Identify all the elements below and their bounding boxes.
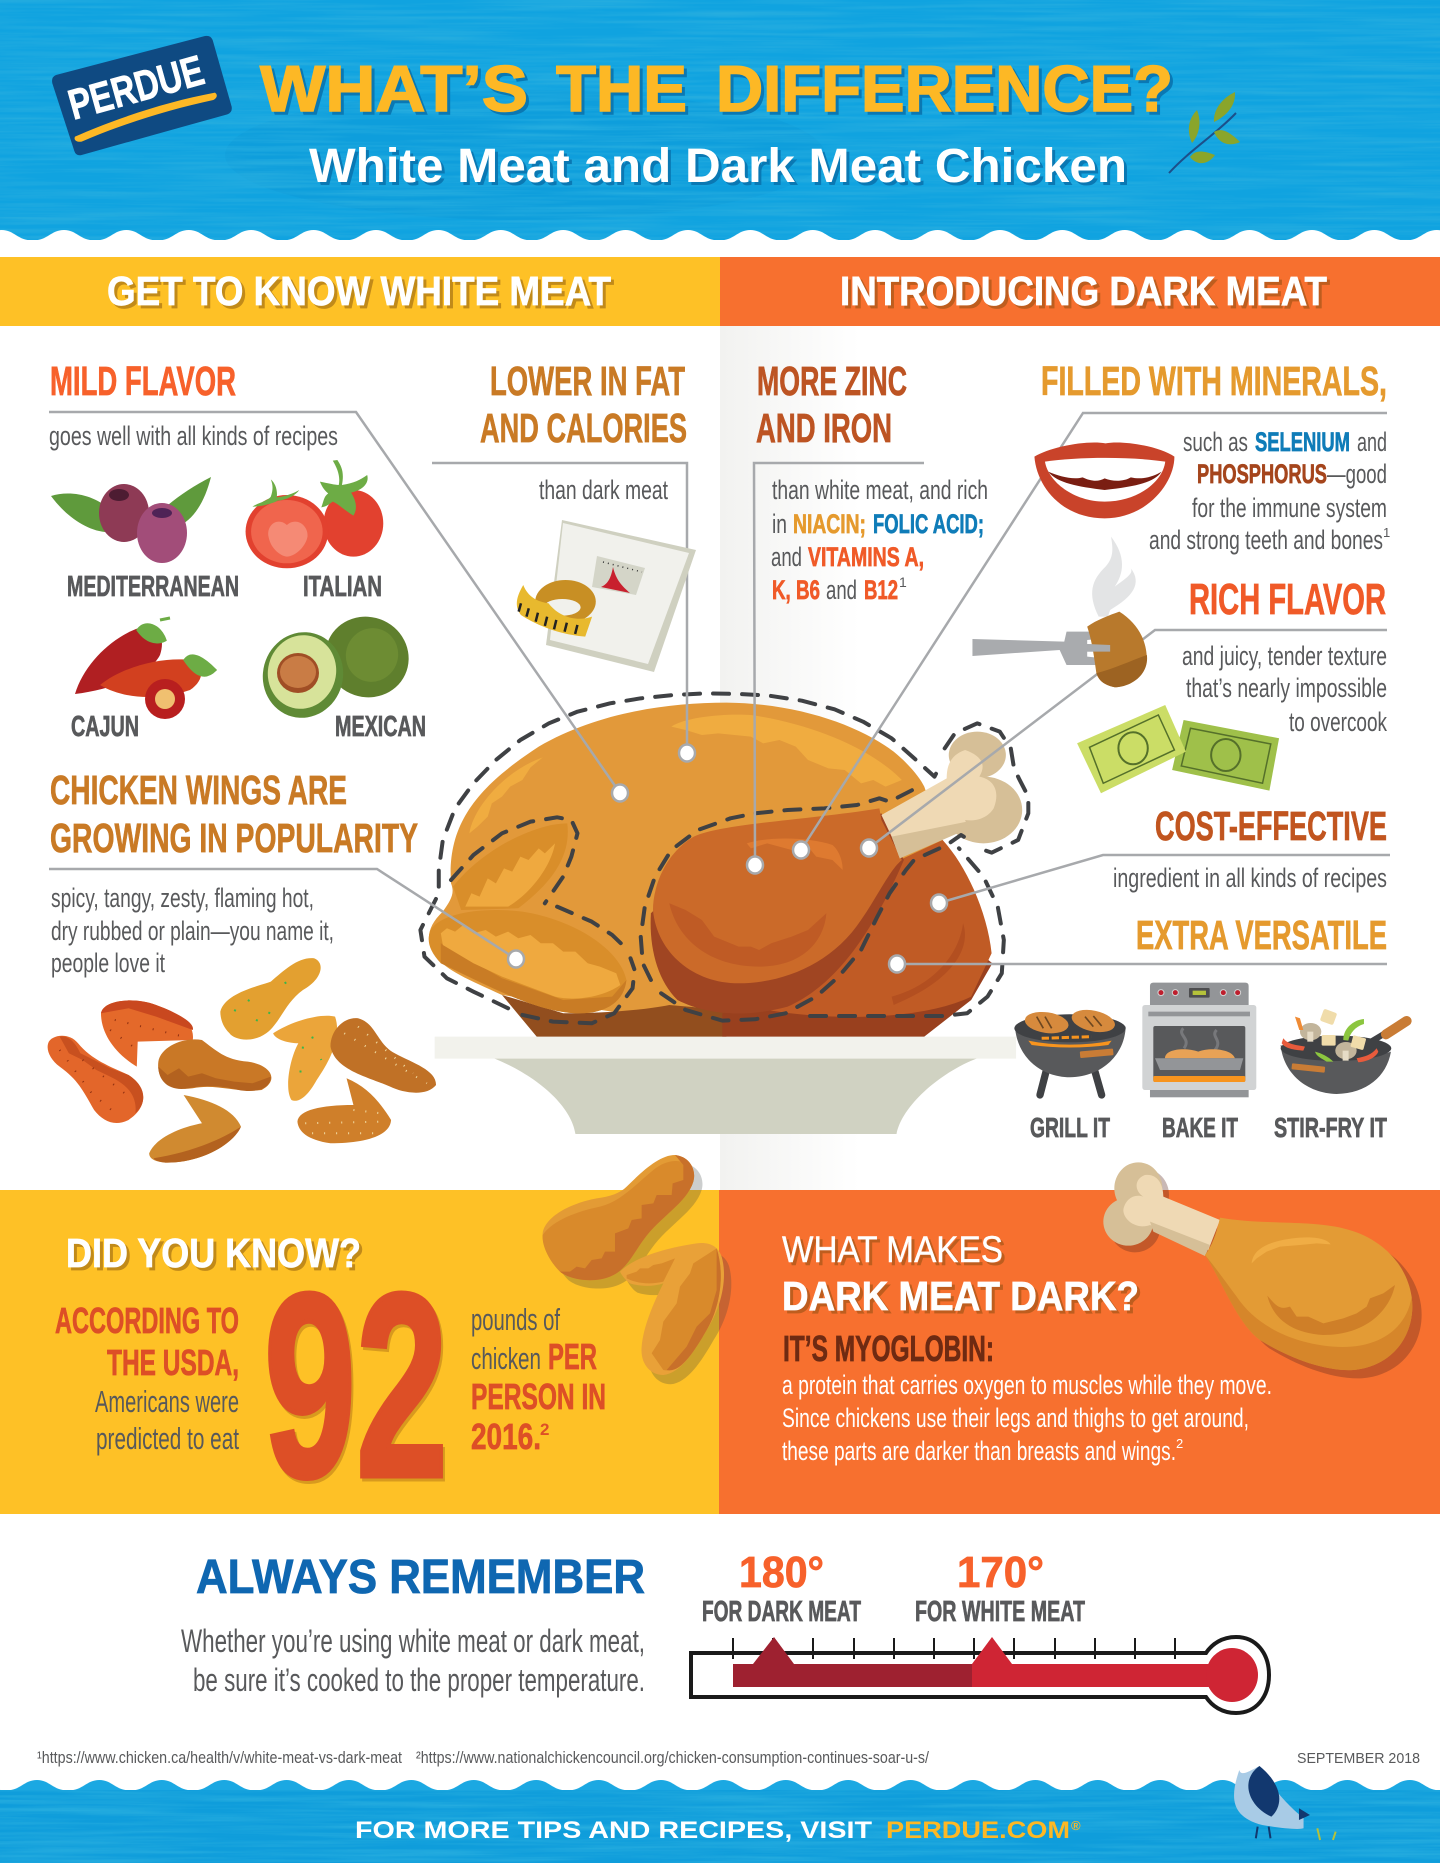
panel: cost-effective [1113,803,1387,893]
footnotes: ¹https://www.chicken.ca/health/v/white-meat-vs-dark-meat [37,1748,402,1767]
text: niacin folic acid vitamins: than white meat, and rich [772,475,988,505]
text: cooking reminder [181,1623,645,1698]
panel: lower in fat [480,358,696,672]
subtitle: White Meat and Dark Meat Chicken [309,140,1127,193]
label: stir-fry it: STIR-FRY IT [1274,1112,1387,1143]
logo: Perdue [52,36,232,155]
text: niacin folic acid vitamins: and [826,575,857,605]
text: myoglobin explanation [782,1370,1272,1466]
panel: always remember [181,1548,1269,1713]
footnotes [37,1748,929,1767]
text: pounds per person: chicken [471,1341,541,1376]
panel: filled with minerals [1034,358,1390,555]
text: selenium phosphorus [1149,427,1390,555]
text: according to usda: Americans were [95,1384,239,1419]
panel: always remember: ALWAYS REMEMBER [196,1551,645,1604]
panel: more zinc and iron [756,358,988,605]
icon: oven [1142,983,1256,1097]
chart: thermometer [691,1637,1269,1713]
text: myoglobin explanation: Since chickens use their legs and thighs to get around, [782,1403,1249,1433]
title [260,52,1173,125]
text: cooking reminder: be sure it’s cooked to the proper temperature. [193,1662,645,1698]
text: niacin folic acid vitamins: NIACIN; [793,509,866,539]
text: visit perdue.com [355,1817,1081,1844]
icon: wok [1281,1009,1407,1094]
text: according to usda: predicted to eat [96,1421,239,1456]
heading: and iron: AND IRON [756,405,892,451]
icon: avocados [253,603,422,727]
footnotes: ²https://www.nationalchickencouncil.org/chicken-consumption-continues-soar-u-s/ [416,1748,929,1767]
text: cooking reminder: Whether you’re using white meat or dark meat, [181,1623,645,1659]
text: niacin folic acid vitamins: in [772,509,787,539]
number: 180: 180° [739,1548,824,1597]
panel: mild flavor: MILD FLAVOR [50,358,236,404]
text: pounds per person [471,1302,606,1457]
panel: mild flavor [49,358,426,743]
label: bake it: BAKE IT [1162,1112,1238,1143]
icon: tomatoes [246,460,383,568]
panel: chicken wings [48,767,436,1163]
icon: fork with meat and steam [972,537,1147,687]
title: THE [556,52,687,125]
callout dots [508,744,947,972]
band: introducing dark meat [720,257,1440,326]
icon: dollar bills [1077,705,1279,793]
text: wing flavors: spicy, tangy, zesty, flaming hot, [51,883,314,913]
text: wing flavors [51,883,334,978]
band: get to know white meat [0,257,720,326]
text: pounds per person: PERSON IN [471,1376,606,1417]
marker: 180 degrees [753,1637,794,1664]
label: mediterranean: MEDITERRANEAN [67,571,239,603]
icon: smiling mouth [1034,442,1174,518]
text: niacin folic acid vitamins: K, B6 [772,575,820,605]
text: niacin folic acid vitamins [771,475,988,605]
text: wing flavors: dry rubbed or plain—you name it, [51,916,334,946]
label: for white meat: FOR WHITE MEAT [915,1596,1085,1628]
number: 170: 170° [957,1548,1044,1597]
dashed outlines [420,693,1028,1023]
panel: more zinc and iron: MORE ZINC [757,358,907,404]
text: according to usda: ACCORDING TO [55,1300,239,1341]
heading: growing in popularity: GROWING IN POPULARITY [50,815,418,861]
label: italian: ITALIAN [303,571,382,603]
header banner [0,0,1440,241]
icon: drumstick and wing [543,1155,731,1384]
icon: drumstick bone [881,732,1022,858]
panel: extra versatile [1030,912,1387,1143]
label: mexican: MEXICAN [335,711,426,743]
text: niacin folic acid vitamins: VITAMINS A, [808,542,924,572]
heading: dark meat dark: DARK MEAT DARK? [782,1273,1139,1319]
text: pounds per person: pounds of [471,1302,560,1337]
shadow: drumstick [1110,1169,1422,1378]
text: pounds per person: 2 [540,1420,549,1439]
logo: Perdue: PERDUE [63,46,209,130]
icon: peppers [75,618,215,719]
date: SEPTEMBER 2018 [1297,1750,1420,1767]
icon: grill [1014,1006,1126,1095]
panel: lower in fat: LOWER IN FAT [490,358,685,404]
text: selenium phosphorus: —good [1327,459,1387,489]
footer banner [0,1766,1440,1863]
text: juicy tender: to overcook [1289,707,1387,737]
icon: drumstick [1103,1162,1422,1378]
text: visit perdue.com: FOR MORE TIPS AND RECIPES, VISIT [355,1817,872,1844]
shadow: drumstick and wing [551,1163,731,1384]
text: selenium phosphorus: and [1357,427,1387,457]
text: visit perdue.com: ® [1071,1818,1081,1833]
icon: bird [1234,1766,1336,1840]
text: recipes: goes well with all kinds of recipes [49,421,338,451]
text: according to usda: THE USDA, [107,1342,239,1383]
panel: chicken wings: CHICKEN WINGS ARE [50,767,347,813]
title: WHAT’S [260,52,528,125]
icon: scale and tape [517,520,696,672]
illustration: roast chicken [420,693,1028,1037]
text: pounds per person: PER [548,1336,597,1377]
text: pounds per person: 2016. [471,1416,541,1457]
marker: 170 degrees [972,1637,1012,1664]
title: DIFFERENCE? [716,52,1173,125]
text: niacin folic acid vitamins: FOLIC ACID; [873,509,984,539]
text: wing flavors: people love it [51,948,165,978]
callout lines [49,412,1390,964]
text: selenium phosphorus: such as [1183,427,1248,457]
text: visit perdue.com: PERDUE.COM [886,1817,1070,1844]
panel: rich flavor [972,537,1387,793]
text: than dark meat: than dark meat [539,475,668,505]
text: myoglobin explanation: 2 [1176,1436,1183,1451]
panel: what makes dark meat dark [719,1190,1440,1514]
icon: olives [51,477,211,563]
band: introducing dark meat: INTRODUCING DARK MEAT [840,268,1327,314]
text: niacin folic acid vitamins: 1 [899,574,907,590]
center background fade [720,326,860,1190]
panel: did you know [0,1190,719,1532]
text: niacin folic acid vitamins: B12 [864,575,898,605]
heading: did you know: DID YOU KNOW? [66,1230,361,1276]
icon: leaf sprig [1169,92,1240,173]
text: selenium phosphorus: SELENIUM [1255,427,1350,457]
text: according to usda [55,1300,239,1456]
icon: pile of wings [48,958,436,1163]
label: grill it: GRILL IT [1030,1112,1110,1143]
heading: and calories: AND CALORIES [480,405,687,451]
text: myoglobin explanation: these parts are darker than breasts and wings. [782,1436,1176,1466]
heading: myoglobin: IT’S MYOGLOBIN: [783,1328,994,1369]
text: juicy tender [1182,641,1387,737]
band: get to know white meat: GET TO KNOW WHITE MEAT [107,268,611,314]
text: selenium phosphorus: PHOSPHORUS [1197,459,1327,489]
label: for dark meat: FOR DARK MEAT [702,1596,861,1628]
heading: what makes: WHAT MAKES [782,1229,1003,1270]
label: cajun: CAJUN [71,711,139,743]
plate [435,1037,1016,1134]
big number: 92 [264,1239,448,1532]
text: selenium phosphorus: 1 [1383,525,1390,540]
text: niacin folic acid vitamins: and [771,542,802,572]
